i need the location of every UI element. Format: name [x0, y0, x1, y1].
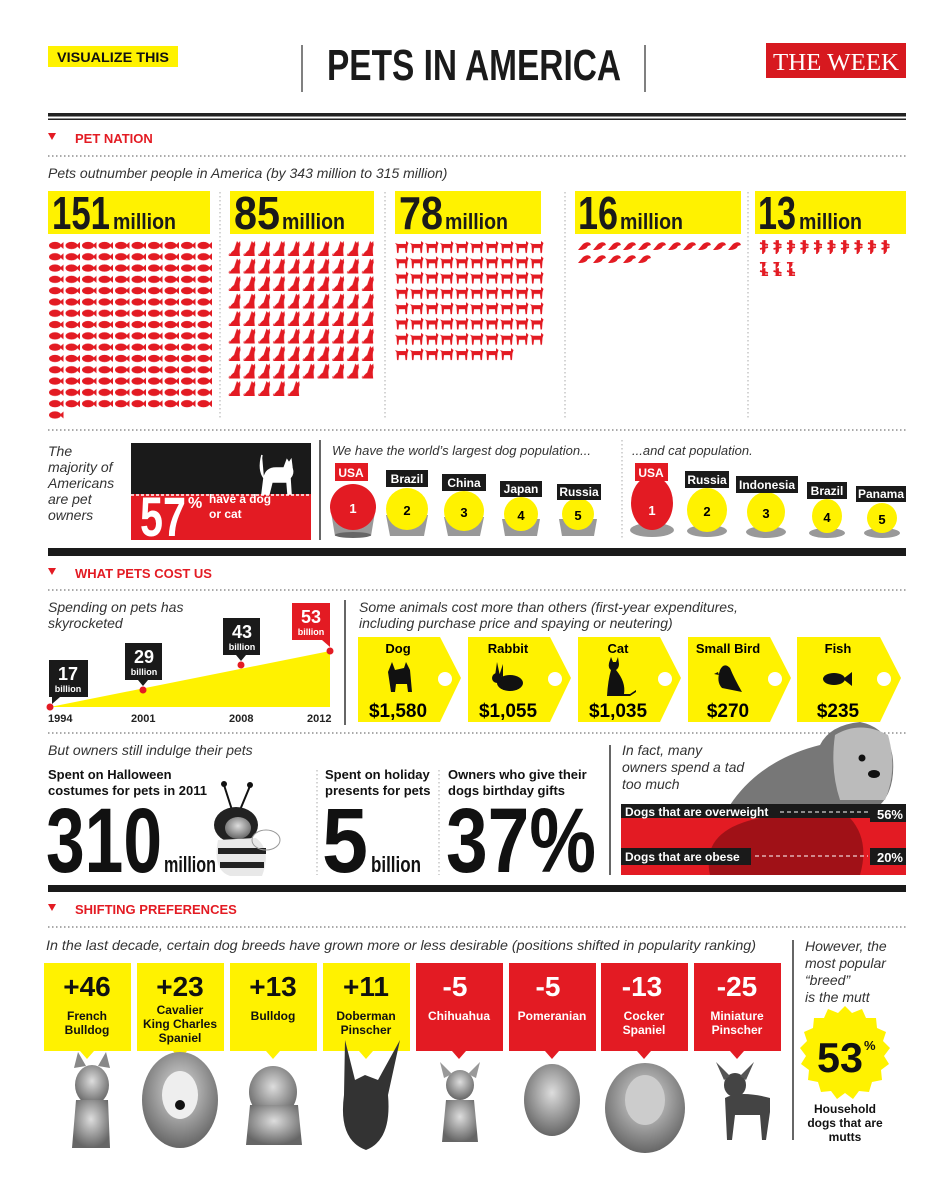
- chart: spending on pets: billion: [298, 627, 324, 637]
- panel: overweight dogs: In fact, many: [622, 742, 703, 758]
- stat: halloween costumes: costumes for pets in 2011: [48, 783, 207, 798]
- chart: spending on pets: 29: [134, 647, 154, 667]
- column: fish 151 million: [48, 187, 213, 421]
- panel: overweight dogs: Dogs that are overweight: [625, 805, 768, 819]
- breed boxes: Cocker: [624, 1009, 665, 1023]
- stat: holiday presents: Spent on holiday: [325, 767, 430, 782]
- cat population bowls: Indonesia: [739, 478, 795, 492]
- text: majority of Americans: owners: [48, 507, 93, 523]
- stat: holiday presents: presents for pets: [325, 783, 430, 798]
- cat population bowls: Brazil: [811, 484, 843, 498]
- dog photos: [72, 1040, 770, 1153]
- chart: spending on pets: 53: [301, 607, 321, 627]
- panel: mutts: most popular: [805, 955, 887, 971]
- breed boxes: +46: [63, 971, 111, 1002]
- logo: the week: [766, 43, 906, 78]
- stat: holiday presents: [322, 767, 430, 892]
- section heading: shifting preferences: SHIFTING PREFERENCES: [75, 902, 237, 917]
- price tags: Some animals cost more than others (first-year expenditures,: [359, 599, 738, 615]
- dog population bowls: Brazil: [391, 472, 423, 486]
- breed boxes: King Charles: [143, 1017, 217, 1031]
- subtitle: breeds: In the last decade, certain dog breeds have grown more or less desirable (positions shifted in popularity ranking): [46, 937, 756, 953]
- price tags: $1,580: [369, 701, 427, 722]
- stat: birthday gifts: [446, 767, 596, 892]
- stat: holiday presents: billion: [371, 852, 421, 877]
- breed boxes: Pinscher: [341, 1023, 392, 1037]
- dog population bowls: 3: [460, 505, 468, 520]
- title: PETS IN AMERICA: [327, 41, 621, 90]
- price tags: Small Bird: [696, 641, 760, 656]
- dog population bowls: 1: [349, 501, 357, 516]
- chart: spending on pets: 2001: [131, 713, 155, 725]
- price tags: Cat: [608, 641, 629, 656]
- column: dogs 78 million: 78: [399, 187, 443, 239]
- cat population bowls: Russia: [687, 473, 727, 487]
- stat box: 57%: [131, 443, 311, 548]
- section heading: pet nation: PET NATION: [75, 131, 153, 146]
- starburst: 53%: 53: [817, 1034, 863, 1081]
- cat population bowls: 5: [878, 512, 886, 527]
- chart: spending on pets: 2012: [307, 713, 331, 725]
- panel: overweight dogs: owners spend a tad: [622, 759, 745, 775]
- breed boxes: French: [67, 1009, 107, 1023]
- breed boxes: -5: [443, 971, 467, 1002]
- chart: spending on pets: billion: [229, 642, 255, 652]
- subtitle: Pets outnumber people in America (by 343 million to 315 million): [48, 165, 447, 181]
- starburst: 53%: %: [864, 1038, 876, 1053]
- chart: spending on pets: billion: [131, 667, 157, 677]
- cat population bowls: 1: [648, 503, 656, 518]
- column: birds 16 million: million: [620, 209, 683, 234]
- stat: holiday presents: 5: [322, 790, 368, 892]
- logo: the week: THE WEEK: [773, 50, 900, 76]
- chart: spending on pets: 1994: [48, 713, 73, 725]
- breed boxes: -25: [717, 971, 757, 1002]
- breed boxes: Miniature: [710, 1009, 764, 1023]
- cat population bowls: Panama: [858, 487, 904, 501]
- price tags: [358, 599, 901, 722]
- section heading: what pets cost us: WHAT PETS COST US: [75, 566, 212, 581]
- dog population bowls: 5: [574, 508, 582, 523]
- column: reptiles 13 million: million: [799, 209, 862, 234]
- cat population bowls: ...and cat population.: [632, 443, 753, 458]
- panel: mutts: “breed”: [805, 972, 851, 988]
- dog population bowls: China: [447, 476, 481, 490]
- text: majority of Americans: majority of: [48, 459, 115, 475]
- panel: overweight dogs: Dogs that are obese: [625, 850, 740, 864]
- column: cats 85 million: [228, 187, 376, 398]
- text: majority of Americans: Americans: [47, 475, 114, 491]
- column: dogs 78 million: million: [445, 209, 508, 234]
- stat: birthday gifts: Owners who give their: [448, 767, 587, 782]
- breed boxes: Cavalier: [157, 1003, 204, 1017]
- dog population bowls: Japan: [504, 482, 538, 496]
- dog population bowls: [330, 443, 601, 538]
- column: cats 85 million: million: [282, 209, 345, 234]
- cat population bowls: USA: [638, 466, 664, 480]
- breed boxes: +11: [343, 971, 389, 1002]
- breed boxes: +13: [249, 971, 297, 1002]
- breed boxes: Pomeranian: [518, 1009, 586, 1023]
- breed boxes: Chihuahua: [428, 1009, 490, 1023]
- panel: mutts: dogs that are: [807, 1116, 883, 1130]
- panel: overweight dogs: 56%: [877, 807, 903, 822]
- breed boxes: Spaniel: [159, 1031, 201, 1045]
- price tags: including purchase price and spaying or neutering): [359, 615, 673, 631]
- column: cats 85 million: 85: [234, 187, 280, 239]
- stat box: 57%: 57: [140, 485, 186, 548]
- dog population bowls: Russia: [559, 485, 599, 499]
- icon: cat: [260, 455, 293, 494]
- panel: overweight dogs: [621, 722, 906, 875]
- cat population bowls: 4: [823, 510, 831, 525]
- price tags: $1,055: [479, 701, 537, 722]
- breed boxes: Pinscher: [712, 1023, 763, 1037]
- stat: halloween costumes: Spent on Halloween: [48, 767, 172, 782]
- stat box: 57%: %: [188, 495, 202, 512]
- panel: mutts: However, the: [805, 938, 887, 954]
- price tags: $235: [817, 701, 860, 722]
- price tags: $1,035: [589, 701, 647, 722]
- column: dogs 78 million: [394, 187, 544, 362]
- cat population bowls: 3: [762, 506, 770, 521]
- stat: halloween costumes: 310: [46, 790, 162, 892]
- dog population bowls: 2: [403, 503, 411, 518]
- panel: mutts: mutts: [829, 1130, 862, 1144]
- column: reptiles 13 million: [755, 187, 906, 276]
- stat: birthday gifts: dogs birthday gifts: [448, 783, 565, 798]
- chart: spending on pets: Spending on pets has: [48, 599, 183, 615]
- dog population bowls: 4: [517, 508, 525, 523]
- price tags: Fish: [825, 641, 851, 656]
- badge: visualize this: VISUALIZE THIS: [57, 49, 169, 65]
- cat population bowls: [630, 443, 906, 538]
- subheading: owners indulge: But owners still indulge their pets: [48, 742, 253, 758]
- badge: visualize this: [48, 46, 178, 67]
- column: birds 16 million: 16: [578, 187, 618, 239]
- column: fish 151 million: million: [113, 209, 176, 234]
- chart: spending on pets: skyrocketed: [48, 615, 124, 631]
- breed boxes: Doberman: [336, 1009, 396, 1023]
- stat: birthday gifts: 37%: [446, 790, 596, 892]
- chart: spending on pets: 2008: [229, 713, 253, 725]
- breed boxes: [44, 963, 781, 1059]
- stat box: 57%: or cat: [209, 507, 242, 521]
- chart: spending on pets: [46, 599, 334, 725]
- stat: halloween costumes: million: [164, 852, 216, 877]
- price tags: Rabbit: [488, 641, 529, 656]
- breed boxes: Bulldog: [251, 1009, 295, 1023]
- price tags: $270: [707, 701, 749, 722]
- image: dog in bee costume: [214, 781, 280, 876]
- breed boxes: -5: [536, 971, 560, 1002]
- panel: overweight dogs: 20%: [877, 850, 903, 865]
- dog population bowls: USA: [338, 466, 364, 480]
- panel: mutts: [800, 938, 890, 1144]
- column: fish 151 million: 151: [52, 187, 110, 239]
- breed boxes: Spaniel: [623, 1023, 665, 1037]
- chart: spending on pets: 17: [58, 664, 78, 684]
- panel: overweight dogs: too much: [622, 776, 680, 792]
- column: birds 16 million: [575, 187, 742, 266]
- panel: mutts: Household: [814, 1102, 876, 1116]
- starburst: 53%: [800, 1006, 890, 1099]
- dog population bowls: We have the world’s largest dog population...: [332, 443, 591, 458]
- breed boxes: +23: [156, 971, 204, 1002]
- stat: halloween costumes: [46, 767, 280, 892]
- image: beagle: [730, 722, 893, 875]
- breed boxes: -13: [622, 971, 662, 1002]
- text: majority of Americans: are pet: [48, 491, 93, 507]
- chart: spending on pets: 43: [232, 622, 252, 642]
- text: majority of Americans: The: [48, 443, 72, 459]
- chart: spending on pets: billion: [55, 684, 81, 694]
- column: reptiles 13 million: 13: [758, 187, 796, 239]
- breed boxes: Bulldog: [65, 1023, 109, 1037]
- cat population bowls: 2: [703, 504, 711, 519]
- panel: mutts: is the mutt: [805, 989, 871, 1005]
- price tags: Dog: [385, 641, 411, 656]
- stat box: 57%: have a dog: [209, 492, 271, 506]
